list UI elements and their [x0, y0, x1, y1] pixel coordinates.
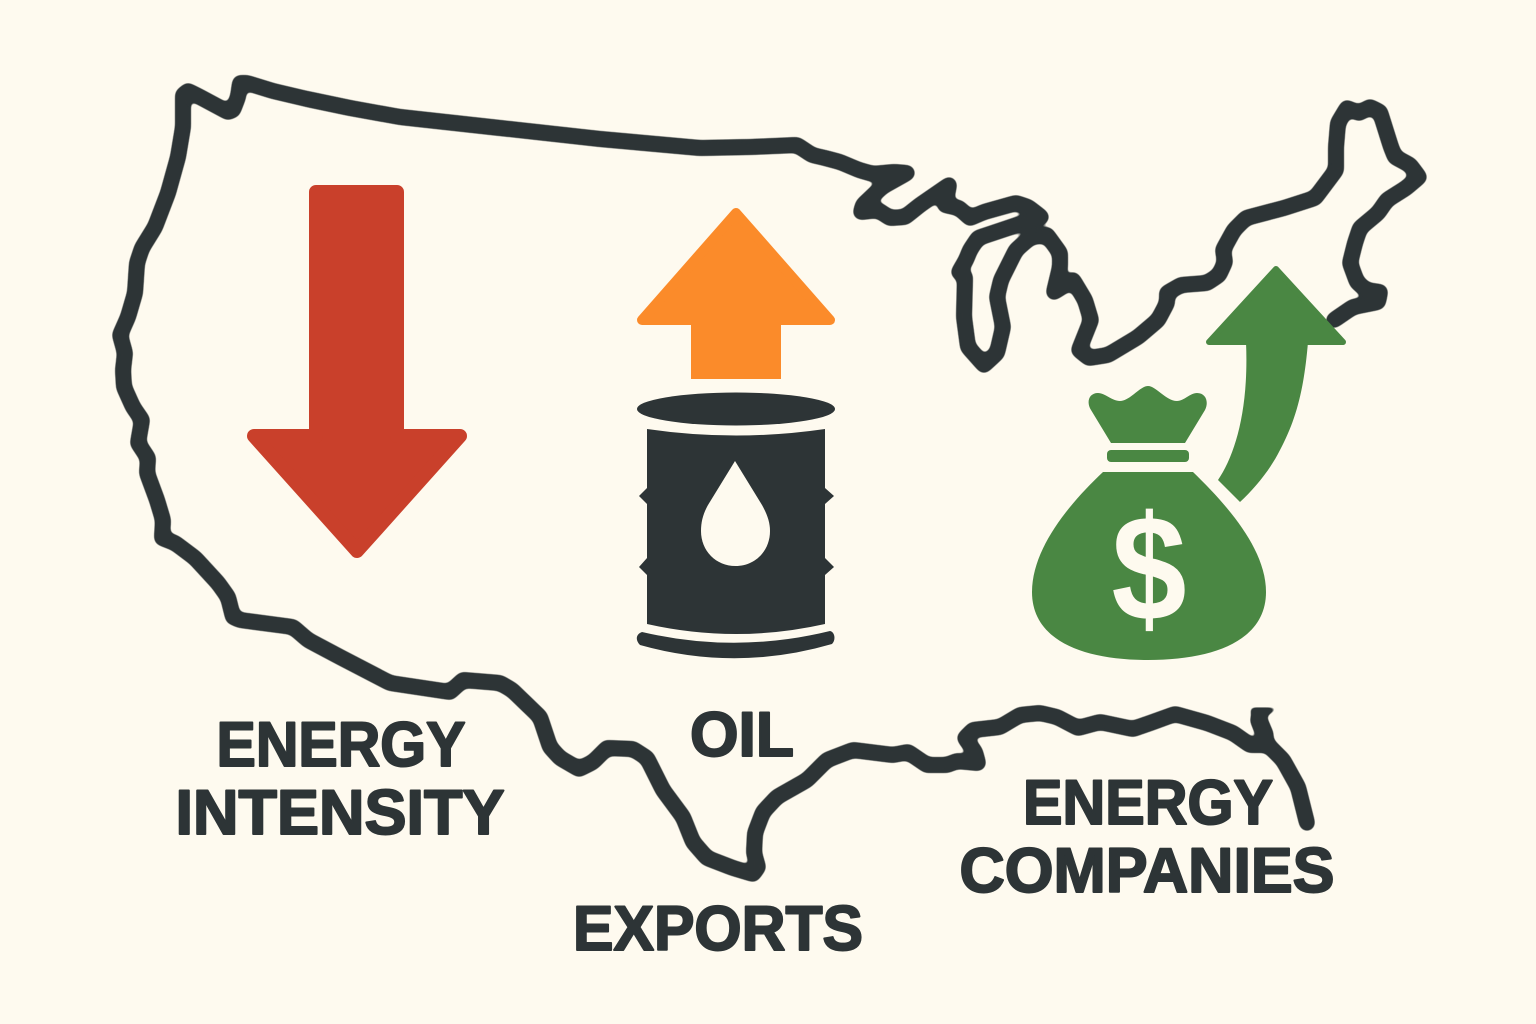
icon: oil barrel	[637, 392, 835, 658]
label: energy intensity	[176, 710, 504, 848]
barrel base	[637, 631, 834, 658]
label: exports: EXPORTS	[573, 894, 863, 964]
bag top	[1089, 386, 1207, 443]
label: energy companies: COMPANIES	[960, 836, 1334, 906]
bag tie	[1107, 450, 1189, 462]
label: oil: OIL	[690, 700, 794, 770]
map outline: United States	[120, 83, 1419, 874]
label: energy intensity: INTENSITY	[176, 778, 504, 848]
icon: green curved arrow	[1209, 269, 1343, 502]
label: energy companies	[960, 768, 1334, 906]
bag body	[1032, 472, 1266, 660]
icon: oil drop	[701, 461, 770, 566]
icon: red down arrow	[254, 192, 460, 551]
label: energy intensity: ENERGY	[216, 710, 466, 780]
dollar sign: $	[1111, 485, 1187, 653]
icon: orange up arrow	[642, 213, 830, 379]
label: energy companies: ENERGY	[1023, 768, 1273, 838]
icon: money bag	[1032, 386, 1266, 660]
barrel lid	[637, 392, 835, 426]
barrel body	[639, 429, 834, 634]
